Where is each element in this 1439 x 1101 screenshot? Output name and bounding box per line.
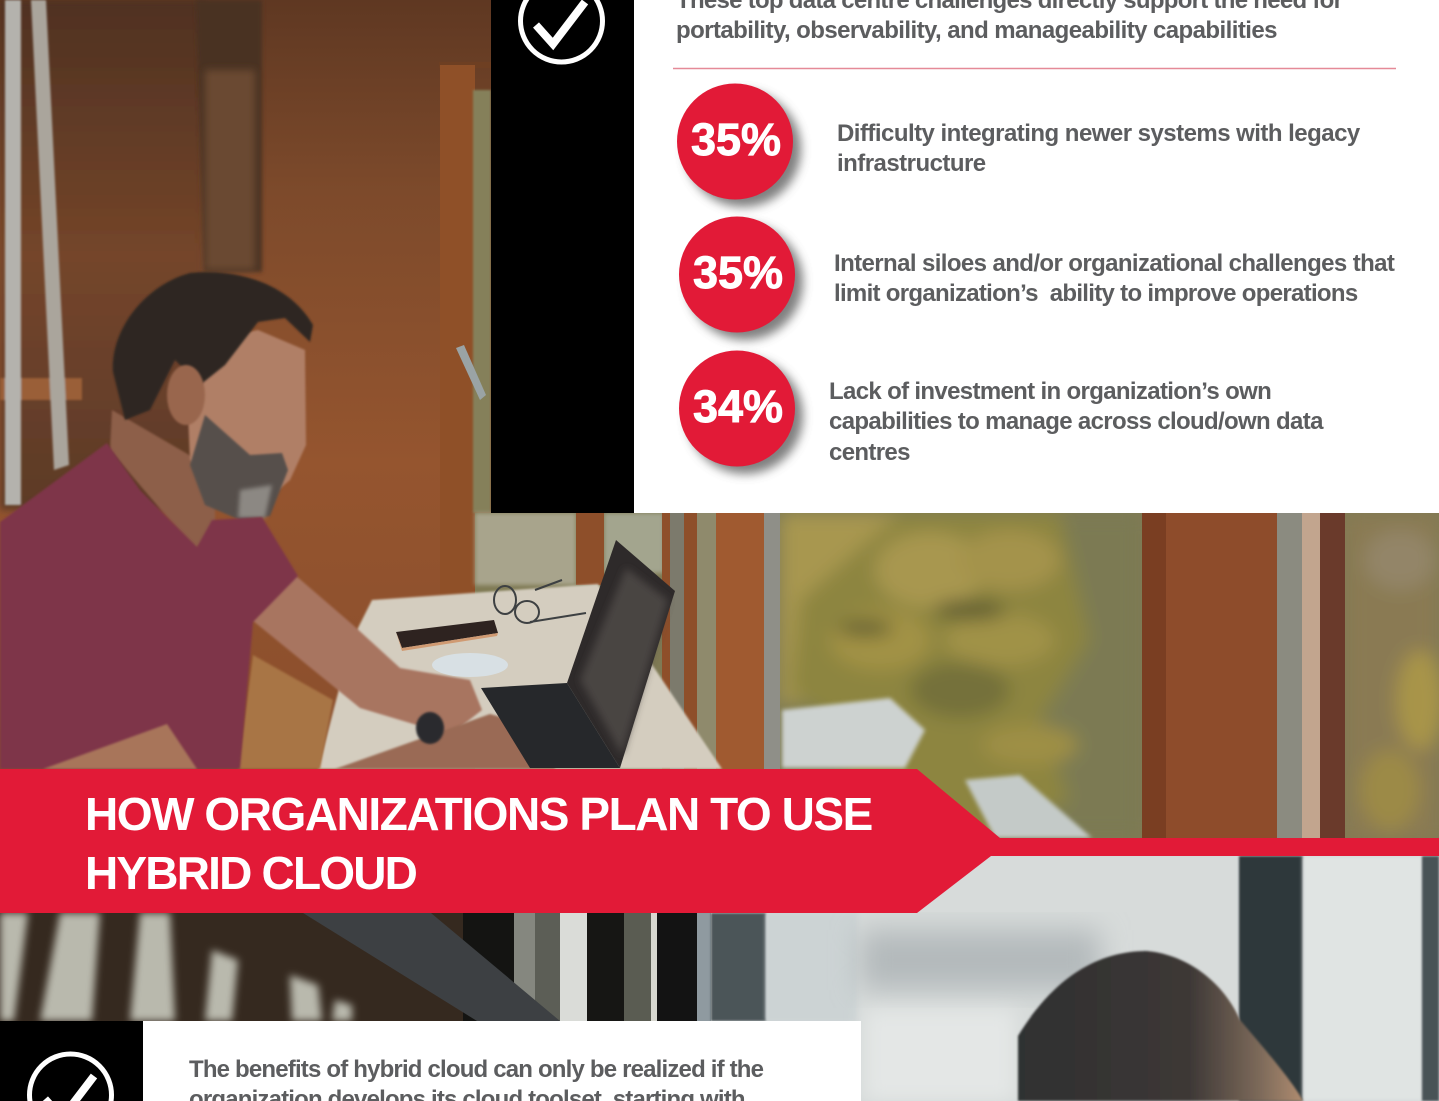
black side bar: top section [491, 0, 634, 513]
blurred window columns [463, 913, 856, 1021]
snowy ground [782, 698, 1092, 838]
wooden window frames [576, 513, 1345, 843]
face [185, 330, 306, 510]
photo: man working on a laptop in a wooden cabin [0, 0, 1439, 843]
stat: 35% legacy integration: 35% [691, 114, 781, 165]
door frame [439, 62, 491, 595]
ear [167, 365, 205, 425]
laptop, phone, mouse and glasses [396, 540, 675, 768]
stat: 34% lack of investment: capabilities to manage across cloud/own data [829, 408, 1324, 435]
stat: 34% lack of investment: centres [829, 439, 910, 466]
desk [318, 584, 722, 769]
stat: 35% legacy integration: infrastructure [837, 150, 986, 177]
beard [190, 415, 288, 520]
icon: check mark in circle, bottom [30, 1054, 112, 1101]
icon: check mark in circle [520, 0, 602, 62]
near hand [335, 714, 555, 769]
stat: 34% lack of investment: Lack of investment in organization’s own [829, 378, 1271, 405]
burgundy t-shirt [0, 443, 298, 769]
panel: data centre challenges [634, 0, 1439, 513]
photo: woman in blurred office [0, 856, 1439, 1101]
window view with trees [475, 513, 1439, 843]
stat: 35% internal siloes [679, 216, 1395, 340]
black side bar: bottom section [0, 1021, 143, 1101]
man [0, 272, 555, 769]
stat: 35% internal siloes: Internal siloes and/or organizational challenges that [834, 250, 1394, 277]
stat: 34% lack of investment: 34% [693, 381, 783, 432]
spruce tree [780, 513, 1142, 838]
stat: 35% legacy integration [677, 84, 1361, 207]
dark diagonal slab [303, 913, 560, 1021]
stat: 35% internal siloes: limit organization’s ability to improve operations [834, 280, 1358, 307]
panel: benefits of hybrid cloud [143, 1021, 861, 1101]
stat: 35% internal siloes: 35% [693, 247, 783, 298]
wooden stool [238, 655, 333, 769]
banner: section heading [0, 769, 1439, 913]
stat: 34% lack of investment [679, 350, 1324, 474]
neck [110, 410, 215, 550]
woman's hair [1018, 951, 1303, 1101]
stat: 35% legacy integration: Difficulty integrating newer systems with legacy [837, 120, 1360, 147]
panel: benefits of hybrid cloud: The benefits of hybrid cloud can only be realized if the [189, 1056, 763, 1083]
hanging white straps [0, 0, 82, 505]
banner: section heading: HYBRID CLOUD [85, 847, 417, 899]
distant autumn forest [1345, 513, 1439, 843]
near arm [43, 724, 197, 769]
dark wooden beam [196, 0, 262, 272]
arm and hand [252, 575, 482, 735]
blurred foreground plant [0, 913, 470, 1021]
intro text: portability, observability, and manageability capabilities [676, 17, 1277, 44]
banner: section heading: HOW ORGANIZATIONS PLAN TO USE [85, 788, 872, 840]
hair [113, 272, 313, 420]
